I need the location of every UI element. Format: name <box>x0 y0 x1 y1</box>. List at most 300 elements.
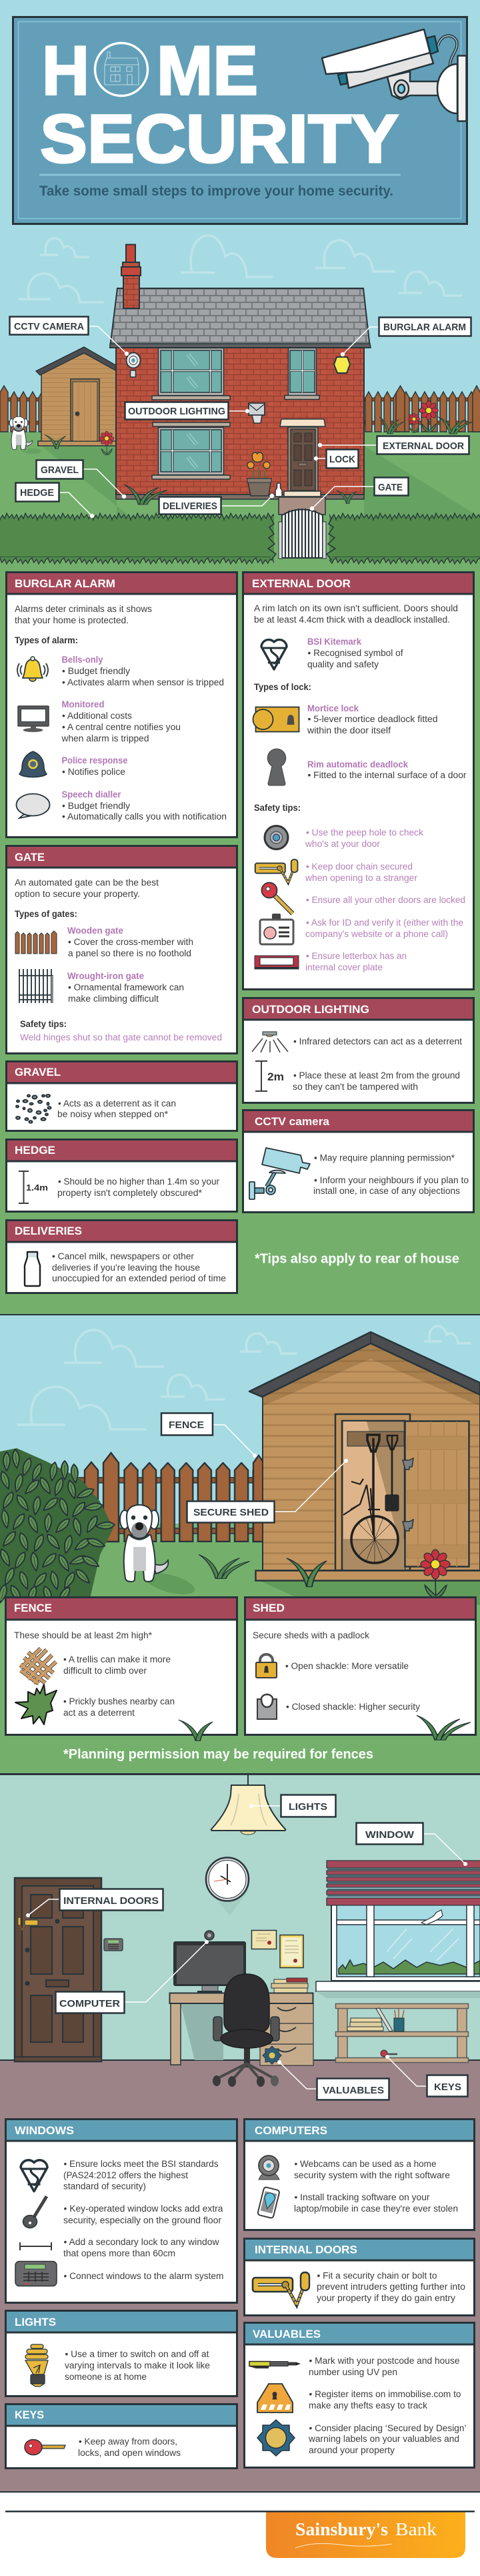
heading: GRAVEL <box>15 1066 61 1078</box>
alarm panel <box>104 1939 123 1951</box>
text: secondary lock: • Add a secondary lock to any window <box>64 2237 219 2247</box>
item: speech dialler: • Budget friendly <box>62 801 130 811</box>
tip: id <box>305 918 463 939</box>
text: design labels: • Consider placing ‘Secured by Design’ <box>309 2423 467 2433</box>
heading: COMPUTERS <box>255 2124 327 2137</box>
bush text <box>63 1696 175 1718</box>
label: window <box>356 1823 467 1866</box>
fence: left and right <box>0 386 480 432</box>
path to gate <box>279 497 325 515</box>
label: burglar alarm: BURGLAR ALARM <box>383 322 466 333</box>
label: lock <box>314 450 359 468</box>
text: open shackle: • Open shackle: More versatile <box>285 1661 409 1671</box>
office chair <box>213 1974 279 2087</box>
text: window locks: • Key-operated window locks add extra <box>64 2204 223 2214</box>
icon: gold padlock <box>256 1654 277 1678</box>
tip: door chain: • Keep door chain secured <box>306 862 413 872</box>
body text: • Cancel milk, newspapers or other <box>52 1251 195 1261</box>
icon: height marker: 1.4m <box>26 1183 48 1193</box>
panel: keys <box>5 2404 237 2468</box>
icon: flower big <box>419 401 438 432</box>
intro text: be at least 4.4cm thick with a deadlock installed. <box>254 615 450 625</box>
window <box>316 1905 480 1998</box>
body text: • Use a timer to switch on and off at <box>65 2349 209 2359</box>
title: home security <box>40 32 399 177</box>
heading: FENCE <box>14 1602 52 1614</box>
tip: door chain <box>305 862 418 883</box>
icon: window key <box>23 2196 47 2228</box>
tip: peep hole: • Use the peep hole to check <box>306 828 423 838</box>
intro text: that your home is protected. <box>15 615 129 625</box>
icon: key <box>25 2440 65 2455</box>
icon: 2m marker <box>255 1061 284 1091</box>
sill <box>285 395 319 399</box>
icon: iron gate <box>19 969 53 1003</box>
heading: SHED <box>253 1602 285 1614</box>
logo: sainsbury's bank: Sainsbury's <box>295 2519 388 2539</box>
bush <box>0 1448 115 1605</box>
item: rim automatic deadlock <box>307 759 467 780</box>
label: deliveries: DELIVERIES <box>163 501 217 512</box>
bush text: • Prickly bushes nearby can <box>63 1696 175 1706</box>
item: bells-only: • Budget friendly <box>62 666 130 676</box>
logo: sainsbury's bank <box>266 2512 465 2558</box>
monitor <box>174 1931 245 1993</box>
lawn <box>0 432 480 1315</box>
label: gate <box>310 478 408 511</box>
item: bsi kitemark: • Recognised symbol of <box>308 648 403 658</box>
label: computer <box>56 1940 209 2013</box>
safety tips <box>20 1019 222 1042</box>
panel: valuables <box>244 2322 475 2468</box>
window: upper left <box>159 348 224 395</box>
note: planning permission: *Planning permission may be required for fences <box>63 1747 373 1762</box>
text: bsi standards: (PAS24:2012 offers the highest <box>63 2170 188 2180</box>
icon: monitor <box>18 706 49 732</box>
body text: unoccupied for an extended period of time <box>52 1273 226 1283</box>
icon: house tuft <box>124 485 167 505</box>
lawn shadow <box>260 1581 480 1605</box>
panel: fence <box>5 1598 237 1735</box>
item: speech dialler: Speech dialler <box>61 789 121 799</box>
body text: deliveries if you're leaving the house <box>52 1263 200 1273</box>
title: home security: SECURITY <box>40 101 399 177</box>
icon: red key <box>261 882 293 914</box>
body text: install one, in case of any objections <box>313 1186 460 1196</box>
icon: bell <box>17 657 48 681</box>
panel: gate <box>7 846 237 1053</box>
text: uv pen: • Mark with your postcode and house <box>309 2356 460 2366</box>
icon: security light <box>249 403 265 423</box>
text: register <box>309 2389 461 2410</box>
label: fence <box>161 1413 257 1458</box>
front door <box>288 427 318 491</box>
text: webcams: security system with the right software <box>294 2170 450 2180</box>
tip: other doors: • Ensure all your other doors are locked <box>306 895 465 905</box>
label: lock: LOCK <box>329 454 355 465</box>
body text: • Keep away from doors, <box>79 2437 177 2447</box>
logo: sainsbury's bank: Bank <box>395 2519 437 2539</box>
sill <box>152 396 230 400</box>
item: speech dialler: • Automatically calls you with notification <box>62 812 227 822</box>
icon: gravel stones <box>16 1094 51 1123</box>
icon: height marker <box>19 1171 48 1203</box>
section divider <box>0 1314 480 1316</box>
panel: outdoor lighting <box>243 998 473 1102</box>
text: tracking: • Install tracking software on your <box>295 2192 430 2202</box>
icon: kitemark <box>261 640 287 669</box>
icon: keypad <box>15 2261 57 2286</box>
text: register: make any thefts easy to track <box>309 2400 427 2410</box>
body text: someone is at home <box>65 2372 147 2382</box>
item: monitored: Monitored <box>61 699 104 709</box>
item: monitored <box>61 699 181 743</box>
label: outdoor lighting: OUTDOOR LIGHTING <box>128 406 225 417</box>
heading: OUTDOOR LIGHTING <box>252 1003 369 1016</box>
icon: secured by design badge <box>257 2420 295 2456</box>
intro text: A rim latch on its own isn't sufficient. Doors should <box>254 603 458 613</box>
body text: • Fit a security chain or bolt to <box>317 2270 437 2281</box>
heading: EXTERNAL DOOR <box>252 577 351 590</box>
heading: WINDOWS <box>15 2124 74 2137</box>
body text: prevent intruders getting further into <box>317 2282 465 2292</box>
body text: • Infrared detectors can act as a deterrent <box>293 1036 462 1046</box>
body text <box>313 1153 469 1196</box>
clouds <box>17 1326 471 1429</box>
wall <box>116 348 364 495</box>
panel: deliveries <box>7 1220 237 1293</box>
fence <box>73 1453 264 1542</box>
body text <box>317 2270 465 2303</box>
body text: your property if they do gain entry <box>317 2293 455 2303</box>
desk <box>169 1993 313 2065</box>
heading: GATE <box>15 851 45 864</box>
label: secure shed: SECURE SHED <box>193 1507 269 1518</box>
wall <box>0 1775 480 2060</box>
item: police response <box>61 755 128 777</box>
door step <box>284 491 321 497</box>
label: secure shed <box>187 1459 348 1523</box>
clock <box>206 1858 250 1915</box>
trellis text: • A trellis can make it more <box>63 1654 171 1664</box>
body text <box>57 1098 176 1119</box>
text: tracking: laptop/mobile in case they're ever stolen <box>294 2204 458 2214</box>
body text: • Place these at least 2m from the ground <box>293 1070 460 1080</box>
icon: camera <box>249 1148 310 1199</box>
item: speech dialler <box>61 789 227 822</box>
label: internal doors: INTERNAL DOORS <box>63 1895 159 1907</box>
item: police response: • Notifies police <box>62 767 125 777</box>
tagline: Take some small steps to improve your home security. <box>39 184 393 199</box>
text: design labels: warning labels on your valuables and <box>308 2434 459 2444</box>
intro text: An automated gate can be the best <box>15 878 159 888</box>
text: design labels: around your property <box>309 2445 395 2455</box>
icon: mortice lock <box>253 707 299 731</box>
bush text: act as a deterrent <box>63 1708 135 1718</box>
icon: wall camera <box>127 352 140 377</box>
panel: burglar alarm <box>7 573 237 837</box>
body text: • Inform your neighbours if you plan to <box>314 1175 469 1185</box>
body text: property isn't completely obscured* <box>57 1188 203 1198</box>
text: webcams: • Webcams can be used as a home <box>295 2159 436 2169</box>
panel: lights <box>5 2310 237 2396</box>
trellis text <box>63 1654 171 1676</box>
body text: so they can't be tampered with <box>293 1082 418 1092</box>
item: bells-only <box>61 655 224 687</box>
label: valuables: VALUABLES <box>323 2085 384 2096</box>
tuft <box>287 1558 327 1587</box>
icon: kitemark <box>21 2160 47 2192</box>
panel: windows <box>5 2120 237 2302</box>
text: design labels <box>308 2423 467 2455</box>
sill <box>152 475 230 479</box>
panel: internal doors <box>244 2238 475 2316</box>
heading: KEYS <box>15 2408 44 2421</box>
desk shadow <box>181 2003 223 2060</box>
icon: warning label <box>257 2384 293 2412</box>
intro text <box>254 603 458 625</box>
icon: wooden gate <box>15 931 57 954</box>
lawn <box>0 1542 480 1773</box>
text: uv pen <box>309 2356 460 2377</box>
page background sky <box>0 0 480 1315</box>
icon: flower small <box>408 413 420 433</box>
icon: chain <box>253 2272 309 2305</box>
item: monitored: • A central centre notifies you <box>62 722 181 732</box>
icon: bulb <box>25 2344 48 2386</box>
heading: DELIVERIES <box>15 1225 82 1237</box>
label: gate: GATE <box>378 482 403 493</box>
text: uv pen: number using UV pen <box>309 2367 397 2377</box>
icon: id badge <box>260 914 293 944</box>
window: upper right <box>288 348 316 395</box>
label: keys: KEYS <box>434 2081 461 2093</box>
body text <box>65 2349 210 2382</box>
item: wrought-iron gate <box>67 971 184 1004</box>
flower pot <box>247 452 271 496</box>
garden scene <box>0 1315 480 1773</box>
label: burglar alarm <box>341 318 471 356</box>
item: mortice lock: Mortice lock <box>307 703 359 713</box>
label: external door: EXTERNAL DOOR <box>383 440 464 452</box>
icon: peep hole <box>265 826 288 849</box>
icon: webcam <box>259 2156 279 2180</box>
text: bsi standards: • Ensure locks meet the BSI standards <box>64 2159 219 2169</box>
body text: • May require planning permission* <box>314 1153 455 1163</box>
label: cctv camera <box>9 316 129 356</box>
item: bsi kitemark <box>307 637 403 669</box>
dog <box>120 1505 197 1598</box>
icon: tuft by shed <box>45 434 66 448</box>
tip: peep hole: who's at your door <box>305 839 381 849</box>
label: keys <box>385 2055 468 2097</box>
books <box>271 1978 308 1993</box>
title: home security: H <box>42 32 89 109</box>
icon: speech bubble <box>16 794 49 818</box>
icon: garden tuft <box>379 417 404 434</box>
heading: LIGHTS <box>15 2316 56 2328</box>
body text <box>78 2437 181 2458</box>
bicycle <box>343 1479 398 1563</box>
text: register: • Register items on immobilise.com to <box>309 2389 461 2399</box>
body text: • Acts as a deterrent as it can <box>58 1098 176 1108</box>
text: window locks: security, especially on the ground floor <box>63 2216 222 2225</box>
item: wrought-iron gate: • Ornamental framework can <box>68 982 184 992</box>
icon: house in letter O <box>95 43 148 96</box>
label: computer: COMPUTER <box>59 1998 120 2009</box>
item: mortice lock <box>307 703 437 735</box>
tip: letterbox: • Ensure letterbox has an <box>306 951 407 961</box>
item: bells-only: • Activates alarm when sensor is tripped <box>62 677 224 687</box>
panel: external door <box>243 573 473 989</box>
safety tips: Weld hinges shut so that gate cannot be removed <box>20 1032 222 1042</box>
intro text <box>15 604 152 625</box>
icon: trellis <box>21 1648 56 1684</box>
text: webcams <box>294 2159 450 2180</box>
body text <box>52 1251 226 1283</box>
icon: letterbox <box>255 956 299 969</box>
item: monitored: • Additional costs <box>62 711 132 721</box>
item: rim automatic deadlock: • Fitted to the internal surface of a door <box>308 770 467 780</box>
room scene <box>0 1775 480 2493</box>
item: wooden gate <box>67 926 193 958</box>
label: hedge: HEDGE <box>20 487 54 499</box>
title: home security: ME <box>157 32 258 109</box>
shelf <box>336 2003 468 2062</box>
icon: phone <box>257 2187 280 2218</box>
section divider <box>0 1773 480 1775</box>
body text: • Should be no higher than 1.4m so your <box>58 1177 220 1187</box>
heading: INTERNAL DOORS <box>255 2244 357 2256</box>
lintel <box>153 422 230 426</box>
icon: width marker <box>20 2242 51 2250</box>
shed interior <box>342 1421 405 1570</box>
icon: alarm box <box>334 357 350 373</box>
open door <box>405 1421 469 1567</box>
item: wrought-iron gate: make climbing difficult <box>68 994 159 1004</box>
badge sticker <box>263 2046 281 2064</box>
intro text <box>15 878 159 899</box>
icon: cctv camera <box>322 29 467 121</box>
window: lower left <box>159 427 224 475</box>
icon: door chain <box>255 860 297 883</box>
intro text: Secure sheds with a padlock <box>253 1630 369 1640</box>
subheading: Types of lock: <box>254 682 311 692</box>
item: wooden gate: • Cover the cross-member with <box>68 937 193 947</box>
label: external door <box>318 436 469 454</box>
icon: prickly leaf <box>15 1684 57 1724</box>
roof <box>110 288 370 348</box>
item: bsi kitemark: quality and safety <box>307 659 379 669</box>
body text: locks, and open windows <box>78 2448 181 2458</box>
spade <box>367 1435 399 1535</box>
panel: hedge <box>7 1140 237 1212</box>
label: fence: FENCE <box>169 1419 204 1431</box>
intro text: These should be at least 2m high* <box>14 1630 153 1640</box>
label: internal doors <box>26 1889 163 1917</box>
panel: shed <box>245 1598 476 1735</box>
icon: path tuft <box>336 490 357 504</box>
text: secondary lock <box>63 2237 219 2258</box>
heading: VALUABLES <box>253 2328 321 2340</box>
flower <box>421 1550 450 1598</box>
body text <box>293 1070 460 1092</box>
heading: BURGLAR ALARM <box>15 577 115 590</box>
icon: police helmet <box>19 751 47 777</box>
text: closed shackle: • Closed shackle: Higher security <box>286 1702 420 1712</box>
icon: panel tuft right <box>417 1715 471 1740</box>
item: bells-only: Bells-only <box>61 655 103 665</box>
footer band <box>0 2491 480 2576</box>
intro text: Alarms deter criminals as it shows <box>15 604 152 614</box>
item: mortice lock: • 5-lever mortice deadlock fitted <box>308 714 437 724</box>
chimney <box>121 244 141 276</box>
subheading: Types of gates: <box>15 909 77 919</box>
icon: garden tuft right <box>438 417 473 434</box>
sky <box>0 1315 480 1542</box>
hedge <box>0 512 480 565</box>
tip: id: company's website or a phone call) <box>305 929 448 939</box>
label: lights <box>249 1795 336 1817</box>
label: window: WINDOW <box>365 1829 415 1841</box>
text: secondary lock: that opens more than 60cm <box>63 2248 175 2258</box>
item: wooden gate: a panel so there is no foothold <box>68 948 191 958</box>
tip: id: • Ask for ID and verify it (either with the <box>306 918 463 928</box>
icon: ceiling light <box>252 1032 288 1052</box>
text: bsi standards <box>63 2159 219 2192</box>
body text <box>57 1177 220 1198</box>
icon: grey padlock <box>257 1694 277 1719</box>
door <box>15 1878 101 2061</box>
heading: HEDGE <box>15 1144 55 1157</box>
text: bsi standards: standard of security) <box>63 2181 146 2192</box>
hinges <box>403 1458 413 1531</box>
house <box>110 244 371 515</box>
item: wooden gate: Wooden gate <box>67 926 123 936</box>
subheading: Safety tips: <box>254 803 301 813</box>
icon: keyhole <box>267 749 286 785</box>
text: tracking <box>294 2192 458 2214</box>
icon: panel tuft left <box>179 1720 213 1741</box>
label: lights: LIGHTS <box>289 1801 327 1813</box>
note: tips apply to rear: *Tips also apply to rear of house <box>255 1252 459 1267</box>
icon: uv pen <box>249 2361 301 2368</box>
safety tips: Safety tips: <box>20 1019 67 1029</box>
rule <box>39 174 401 176</box>
icon: flower by shed <box>99 431 114 455</box>
window blind <box>327 1861 480 1905</box>
heading: CCTV camera <box>255 1115 330 1128</box>
icon: 2m marker: 2m <box>267 1070 284 1083</box>
lamp <box>211 1775 285 1835</box>
icon: dog <box>9 416 41 454</box>
door frame <box>335 1414 410 1570</box>
label: cctv camera: CCTV CAMERA <box>14 321 84 332</box>
icon: milk bottle <box>25 1252 40 1286</box>
item: mortice lock: within the door itself <box>307 725 391 735</box>
floor <box>0 2060 480 2493</box>
label: gravel <box>36 460 126 499</box>
label: hedge <box>16 483 94 518</box>
item: rim automatic deadlock: Rim automatic deadlock <box>307 759 408 769</box>
tuft <box>199 1554 249 1578</box>
clouds <box>19 236 462 302</box>
item: police response: Police response <box>61 755 128 765</box>
shed <box>249 1332 480 1580</box>
text: window locks <box>63 2204 223 2225</box>
item: monitored: when alarm is tripped <box>61 733 149 743</box>
certificates <box>252 1930 303 1967</box>
